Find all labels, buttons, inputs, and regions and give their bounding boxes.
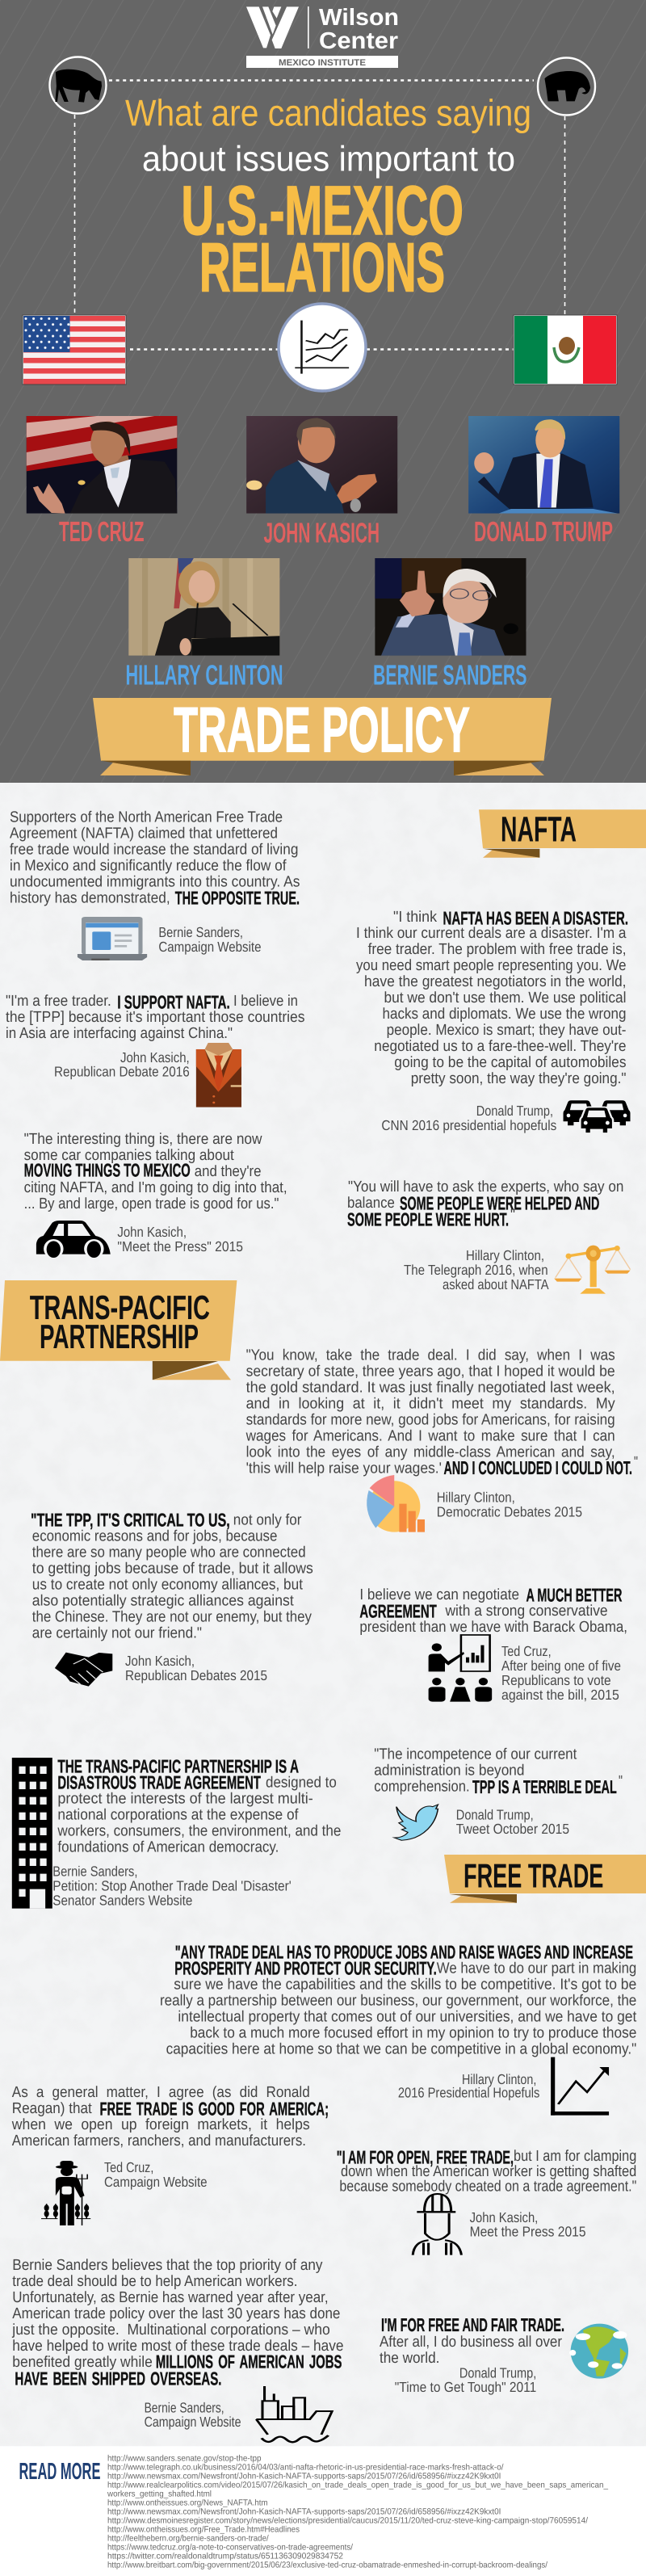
panel: NAFTA section bbox=[6, 809, 646, 1294]
attribution: Bernie Sanders, Campaign Website bbox=[145, 2400, 241, 2430]
attribution: Hillary Clinton, Democratic Debates 2015 bbox=[437, 1489, 582, 1519]
logo: Wilson Center: Wilson bbox=[319, 5, 399, 31]
name: Hillary Clinton: HILLARY CLINTON bbox=[126, 659, 283, 691]
text: Bernie Sanders on NAFTA: Supporters of the North American Free Trade bbox=[10, 809, 283, 826]
panel: candidates bbox=[27, 416, 619, 691]
attribution: Ted Cruz, Campaign Website: Ted Cruz, bbox=[104, 2159, 153, 2175]
text: Kasich on car companies bbox=[24, 1131, 287, 1212]
attribution: Bernie Sanders, Campaign Website: Campaign Website bbox=[158, 939, 262, 955]
text: Kasich supports NAFTA: I SUPPORT NAFTA. bbox=[117, 992, 230, 1013]
text: Clinton on NAFTA: "You will have to ask the experts, who say on bbox=[348, 1179, 623, 1196]
text: Clinton on TPP: the gold standard. It was just finally negotiated last week, bbox=[246, 1379, 615, 1396]
text: Kasich on TPP: to getting jobs because of trade, but it allows bbox=[32, 1560, 313, 1577]
attribution: Bernie Sanders, Campaign Website: Bernie Sanders, bbox=[158, 924, 243, 940]
text: Sanders on free trade: benefited greatly while bbox=[12, 2354, 153, 2371]
attribution: John Kasich, Meet the Press 2015: John Kasich, bbox=[117, 1224, 187, 1240]
attribution: John Kasich, Meet the Press 2015 bbox=[117, 1224, 243, 1254]
text: Kasich on free trade: "I AM FOR OPEN, FREE TRADE, bbox=[337, 2146, 514, 2167]
source links list: http://www.sanders.senate.gov/stop-the-tpp bbox=[107, 2454, 262, 2464]
photo: John Kasich bbox=[246, 416, 397, 514]
attribution: John Kasich, Meet the Press 2015: "Meet the Press" 2015 bbox=[117, 1238, 243, 1254]
attribution: Bernie Sanders, petition bbox=[52, 1864, 292, 1909]
icon: cargo ship bbox=[256, 2386, 332, 2442]
icon: globe bbox=[569, 2324, 628, 2379]
text: Bernie Sanders on NAFTA: in Mexico and significantly reduce the flow of bbox=[10, 857, 287, 874]
text: Kasich on TPP: "THE TPP, IT'S CRITICAL TO US, bbox=[31, 1509, 230, 1530]
name: John Kasich: JOHN KASICH bbox=[263, 517, 380, 549]
source links list bbox=[107, 2454, 608, 2570]
text: Sanders on TPP: protect the interests of the largest multi- bbox=[57, 1790, 313, 1807]
source links list: http://feelthebern.org/bernie-sanders-on-trade/ bbox=[107, 2533, 269, 2543]
text: Trump on NAFTA: free trader. The problem with free trade is, bbox=[368, 941, 627, 958]
logo: Wilson Center bbox=[246, 5, 399, 68]
text: Clinton on NAFTA bbox=[347, 1179, 623, 1229]
icon: farmer bbox=[41, 2161, 90, 2225]
text: Trump on NAFTA: going to be the capital of automobiles bbox=[394, 1054, 627, 1071]
text: Clinton on NAFTA: SOME PEOPLE WERE HURT. bbox=[347, 1208, 509, 1229]
attribution: Bernie Sanders, Campaign Website: Bernie Sanders, bbox=[145, 2400, 224, 2416]
text: Trump on NAFTA: pretty soon, the way they're going." bbox=[411, 1070, 627, 1087]
text: Sanders on TPP: foundations of American democracy. bbox=[57, 1838, 279, 1855]
text: Ted Cruz on free trade: Reagan) that bbox=[12, 2100, 92, 2117]
attribution: Donald Trump, tweet: Donald Trump, bbox=[456, 1806, 534, 1822]
attribution: John Kasich, Republican Debate 2016: John Kasich, bbox=[120, 1049, 190, 1065]
photo: Bernie Sanders bbox=[375, 558, 526, 656]
text: Trump on NAFTA: I think our current deals are a disaster. I'm a bbox=[356, 925, 627, 942]
name: Ted Cruz: TED CRUZ bbox=[59, 516, 144, 548]
attribution: Ted Cruz, after vote: Republicans to vote bbox=[501, 1672, 611, 1688]
text: Kasich on TPP: there are so many people who are connected bbox=[32, 1544, 306, 1561]
attribution: Bernie Sanders, petition: Bernie Sanders, bbox=[52, 1864, 137, 1880]
attribution: Donald Trump, tweet bbox=[456, 1806, 569, 1837]
banner: NAFTA: NAFTA bbox=[501, 810, 577, 850]
text: Kasich on TPP: economic reasons and for jobs, because bbox=[32, 1528, 277, 1544]
heading: Read More: READ MORE bbox=[19, 2459, 100, 2485]
panel: header masthead bbox=[23, 5, 617, 391]
text: Sanders on free trade: Bernie Sanders believes that the top priority of any bbox=[12, 2257, 323, 2274]
attribution: Hillary Clinton, The Telegraph 2016 bbox=[404, 1247, 549, 1292]
icon: democratic donkey bbox=[50, 57, 107, 113]
icon: office building bbox=[12, 1758, 52, 1909]
icon: scales bbox=[554, 1246, 631, 1294]
text: Sanders on free trade: MILLIONS OF AMERICAN JOBS bbox=[156, 2351, 342, 2372]
text: Clinton on TPP: standards for more new, good jobs for Americans, for raising bbox=[246, 1411, 615, 1428]
attribution: Ted Cruz, after vote: against the bill, 2015 bbox=[501, 1687, 619, 1703]
icon: republican elephant bbox=[538, 58, 595, 115]
text: Kasich on TPP: the Chinese. They are not our enemy, but they bbox=[32, 1608, 312, 1625]
text: Clinton on TPP: and in looking at it, it didn't meet my standards. My bbox=[246, 1395, 615, 1412]
text: Sanders on free trade: just the opposite. Multinational corporations – who bbox=[11, 2322, 330, 2339]
text: Sanders on free trade: HAVE BEEN SHIPPED OVERSEAS. bbox=[15, 2368, 222, 2389]
source links list: workers_getting_shafted.html bbox=[107, 2490, 212, 2499]
text: Trump on NAFTA: negotiated us to a fare-thee-well. They're bbox=[374, 1038, 627, 1055]
attribution: John Kasich, Meet the Press 2015: Meet the Press 2015 bbox=[470, 2223, 586, 2239]
text: Trump on TPP: comprehension. bbox=[374, 1778, 470, 1795]
attribution: Bernie Sanders, petition: Petition: Stop Another Trade Deal 'Disaster' bbox=[52, 1878, 292, 1894]
attribution: Hillary Clinton, 2016 Presidential Hopefuls bbox=[398, 2071, 540, 2101]
attribution: Hillary Clinton, 2016 Presidential Hopefuls: 2016 Presidential Hopefuls bbox=[398, 2085, 540, 2101]
text: Sanders on TPP: national corporations at the expense of bbox=[57, 1806, 299, 1823]
text: Trump on free trade: After all, I do business all over bbox=[380, 2334, 563, 2351]
icon: twitter bird bbox=[394, 1805, 438, 1840]
text: Bernie Sanders on NAFTA: undocumented immigrants into this country. As bbox=[10, 873, 300, 890]
icon: presenter and audience bbox=[429, 1635, 492, 1702]
panel: footer read more bbox=[0, 2446, 646, 2576]
text: Trump on TPP: " bbox=[619, 1773, 623, 1790]
attribution: Donald Trump, Time to Get Tough: Donald Trump, bbox=[459, 2364, 536, 2381]
text: Trump on TPP bbox=[374, 1746, 623, 1797]
text: Kasich on car companies: citing NAFTA, and I'm going to dig into that, bbox=[24, 1179, 287, 1196]
icon: suit bbox=[196, 1043, 241, 1107]
text: Sanders on free trade: Unfortunately, as Bernie has warned year after year, bbox=[12, 2289, 329, 2306]
attribution: Donald Trump, Time to Get Tough: "Time to Get Tough" 2011 bbox=[395, 2379, 536, 2395]
title: What are candidates saying bbox=[125, 92, 531, 134]
name: Bernie Sanders: BERNIE SANDERS bbox=[373, 659, 526, 691]
text: Sanders on TPP: workers, consumers, the environment, and the bbox=[57, 1822, 341, 1839]
text: Ted Cruz on free trade: As a general matter, I agree (as did Ronald bbox=[12, 2084, 310, 2101]
text: Bernie Sanders on NAFTA: Agreement (NAFTA) claimed that unfettered bbox=[10, 825, 278, 842]
panel: Trans-Pacific Partnership section bbox=[0, 1280, 638, 1909]
text: Clinton on TPP: 'this will help raise your wages.' bbox=[246, 1460, 442, 1477]
source links list: http://www.newsmax.com/Newsfront/John-Kasich-NAFTA-supports-saps/2015/07/26/id/658956/#ixzz42K9kxt0I bbox=[107, 2507, 501, 2517]
banner: Trans-Pacific Partnership: TRANS-PACIFIC bbox=[30, 1288, 210, 1326]
text: Trump on TPP: administration is beyond bbox=[374, 1762, 525, 1779]
text: Kasich supports NAFTA bbox=[6, 992, 305, 1042]
attribution: John Kasich, Republican Debate 2016 bbox=[54, 1049, 190, 1080]
attribution: Bernie Sanders, Campaign Website bbox=[158, 924, 262, 955]
text: Trump on TPP: "The incompetence of our current bbox=[374, 1746, 577, 1763]
source links list: http://www.breitbart.com/big-government/2015/06/23/exclusive-ted-cruz-obamatrade-enmeshed-in-corrupt-backroom-dealings/ bbox=[107, 2561, 547, 2570]
text: Sanders on free trade: trade deal should be to help American workers. bbox=[12, 2273, 297, 2290]
attribution: Bernie Sanders, petition: Senator Sanders Website bbox=[52, 1893, 192, 1909]
text: Sanders on TPP bbox=[57, 1755, 341, 1855]
text: Clinton on NAFTA: balance bbox=[347, 1195, 395, 1212]
banner: Trans-Pacific Partnership: PARTNERSHIP bbox=[40, 1317, 199, 1355]
text: Sanders on free trade: American trade policy over the last 30 years has done bbox=[12, 2305, 340, 2322]
text: Kasich on car companies: some car companies talking about bbox=[24, 1147, 234, 1164]
icon: US flag bbox=[23, 315, 126, 385]
text: Ted Cruz on free trade: when we open up foreign markets, it helps bbox=[11, 2116, 310, 2133]
text: Clinton on NAFTA: " bbox=[510, 1207, 515, 1224]
source links list: http://www.newsmax.com/Newsfront/John-Kasich-NAFTA-supports-saps/2015/07/26/id/658956/#ixzz42K9kxt0I bbox=[107, 2472, 501, 2481]
icon: chart in circle bbox=[279, 304, 366, 391]
photo: Ted Cruz bbox=[27, 416, 177, 514]
title: U.S.-MEXICO bbox=[181, 172, 464, 250]
attribution: Donald Trump, tweet: Tweet October 2015 bbox=[456, 1821, 569, 1837]
attribution: Hillary Clinton, The Telegraph 2016: The Telegraph 2016, when bbox=[404, 1262, 548, 1278]
attribution: Ted Cruz, Campaign Website bbox=[104, 2159, 208, 2190]
attribution: Donald Trump, CNN 2016 bbox=[381, 1103, 557, 1133]
text: Sanders on TPP: THE TRANS-PACIFIC PARTNERSHIP IS A bbox=[57, 1755, 299, 1776]
text: Trump on NAFTA: have the greatest negotiators in the world, bbox=[364, 973, 627, 990]
text: Trump on free trade: the world. bbox=[380, 2350, 439, 2367]
text: Ted Cruz on TPP: with a strong conservative bbox=[445, 1603, 608, 1620]
text: Bernie Sanders on NAFTA: THE OPPOSITE TRUE. bbox=[175, 887, 300, 908]
icon: three cars bbox=[564, 1100, 631, 1133]
text: Trump on NAFTA: people. Mexico is smart; they have out- bbox=[387, 1022, 627, 1039]
text: Clinton on free trade bbox=[160, 1941, 637, 2058]
attribution: John Kasich, Republican Debates 2015: Republican Debates 2015 bbox=[125, 1667, 267, 1683]
source links list: http://www.ontheissues.org/News_NAFTA.htm bbox=[107, 2498, 268, 2507]
attribution: John Kasich, Republican Debates 2015: John Kasich, bbox=[125, 1653, 195, 1669]
attribution: Donald Trump, CNN 2016: Donald Trump, bbox=[476, 1103, 553, 1119]
attribution: Hillary Clinton, Democratic Debates 2015: Democratic Debates 2015 bbox=[437, 1503, 582, 1519]
text: Ted Cruz on TPP: I believe we can negotiate bbox=[359, 1586, 519, 1603]
text: Trump on NAFTA bbox=[356, 907, 628, 1087]
text: Bernie Sanders on NAFTA: free trade would increase the standard of living bbox=[10, 841, 298, 858]
attribution: John Kasich, Meet the Press 2015 bbox=[470, 2209, 586, 2239]
banner: Trade Policy: TRADE POLICY bbox=[174, 693, 470, 766]
text: Kasich supports NAFTA: in Asia are interfacing against China." bbox=[6, 1025, 233, 1042]
attribution: John Kasich, Meet the Press 2015: John Kasich, bbox=[470, 2209, 538, 2225]
text: Ted Cruz on free trade bbox=[11, 2084, 329, 2149]
logo: Wilson Center: Center bbox=[319, 28, 398, 54]
text: Kasich supports NAFTA: I believe in bbox=[233, 993, 298, 1010]
attribution: Hillary Clinton, 2016 Presidential Hopefuls: Hillary Clinton, bbox=[462, 2071, 536, 2087]
text: Kasich on TPP bbox=[31, 1509, 313, 1641]
title: about issues important to bbox=[142, 139, 515, 179]
text: Trump on NAFTA: "I think bbox=[393, 909, 437, 926]
text: Kasich on TPP: us to create not only economy alliances, but bbox=[32, 1576, 304, 1593]
text: Clinton on TPP: wages for Americans. And I want to make sure that I can bbox=[245, 1427, 615, 1444]
text: Sanders on free trade: have helped to write most of these trade deals – have bbox=[12, 2338, 344, 2355]
decorative connector frame bbox=[74, 81, 565, 349]
text: Trump on free trade bbox=[380, 2314, 564, 2367]
title bbox=[125, 92, 531, 307]
photo: Hillary Clinton bbox=[128, 558, 279, 656]
attribution: Hillary Clinton, The Telegraph 2016: Hillary Clinton, bbox=[466, 1247, 544, 1263]
text: Clinton on TPP: secretary of state, three years ago, that I hoped it would be bbox=[246, 1363, 615, 1380]
icon: construction worker bbox=[413, 2194, 461, 2255]
banner: Trade Policy bbox=[93, 693, 552, 775]
panel: Free Trade section bbox=[11, 1855, 646, 2442]
source links list: http://www.telegraph.co.uk/business/2016/04/03/anti-nafta-rhetoric-in-us-presidential-race-marks-fresh-attack-o/ bbox=[107, 2462, 504, 2472]
text: Clinton on TPP bbox=[245, 1347, 638, 1478]
icon: Mexican flag bbox=[514, 315, 617, 385]
banner: Trans-Pacific Partnership bbox=[0, 1280, 237, 1380]
icon: rising line chart bbox=[551, 2057, 609, 2116]
text: Kasich on TPP: are certainly not our friend." bbox=[32, 1624, 202, 1641]
attribution: Bernie Sanders, Campaign Website: Campaign Website bbox=[145, 2414, 241, 2430]
attribution: Ted Cruz, after vote: After being one of five bbox=[501, 1658, 621, 1674]
title: RELATIONS bbox=[199, 229, 445, 307]
source links list: http://www.realclearpolitics.com/video/2015/07/26/kasich_on_trade_deals_open_trade_is_good_for_us_but_we_have_been_saps_american_ bbox=[107, 2480, 608, 2490]
panel: header background bbox=[0, 0, 646, 783]
attribution: Hillary Clinton, Democratic Debates 2015: Hillary Clinton, bbox=[437, 1489, 515, 1505]
text: Bernie Sanders on NAFTA bbox=[10, 809, 300, 908]
text: Bernie Sanders on NAFTA: history has demonstrated, bbox=[10, 889, 170, 906]
text: Sanders on TPP: DISASTROUS TRADE AGREEMENT bbox=[57, 1771, 261, 1792]
text: Sanders on free trade bbox=[11, 2257, 343, 2389]
text: Trump on NAFTA: but we don't use them. We use political bbox=[384, 990, 627, 1006]
text: Kasich on car companies: MOVING THINGS TO MEXICO bbox=[24, 1160, 191, 1181]
text: Ted Cruz on free trade: FREE TRADE IS GOOD FOR AMERICA; bbox=[100, 2098, 329, 2119]
text: Trump on NAFTA: hacks and diplomats. We use the wrong bbox=[383, 1006, 627, 1023]
text: Clinton on TPP: look into the eyes of any middle-class American and say, bbox=[246, 1443, 615, 1460]
icon: laptop bbox=[78, 917, 147, 960]
attribution: Donald Trump, Time to Get Tough bbox=[395, 2364, 536, 2395]
icon: handshake bbox=[55, 1653, 112, 1687]
text: Ted Cruz on TPP bbox=[359, 1585, 627, 1636]
icon: pie chart bbox=[367, 1475, 425, 1532]
text: Kasich on TPP: not only for bbox=[233, 1511, 302, 1528]
attribution: John Kasich, Republican Debates 2015 bbox=[125, 1653, 267, 1683]
logo: Wilson Center: MEXICO INSTITUTE bbox=[279, 58, 366, 68]
attribution: Ted Cruz, after vote: Ted Cruz, bbox=[501, 1643, 552, 1659]
photo: Donald Trump bbox=[468, 416, 619, 514]
source links list: http://www.ontheissues.org/Free_Trade.htm#Headlines bbox=[107, 2525, 300, 2535]
attribution: Hillary Clinton, The Telegraph 2016: asked about NAFTA bbox=[443, 1276, 549, 1292]
attribution: Ted Cruz, after vote bbox=[501, 1643, 621, 1703]
banner: NAFTA bbox=[479, 809, 646, 858]
attribution: John Kasich, Republican Debate 2016: Republican Debate 2016 bbox=[54, 1064, 190, 1080]
source links list: https://twitter.com/realdonaldtrump/status/651136309029834752 bbox=[107, 2551, 343, 2561]
text: Kasich on free trade bbox=[337, 2146, 636, 2196]
icon: car bbox=[36, 1221, 111, 1259]
text: Kasich on car companies: and they're bbox=[195, 1163, 262, 1180]
text: Kasich on car companies: ... By and large, open trade is good for us." bbox=[24, 1196, 279, 1212]
text: Clinton on free trade: PROSPERITY AND PROTECT OUR SECURITY. bbox=[174, 1957, 437, 1978]
source links list: http://www.desmoinesregister.com/story/news/elections/presidential/caucus/2015/11/20/ted-cruz-steve-king-campaign-stop/76059514/ bbox=[107, 2515, 588, 2525]
attribution: Ted Cruz, Campaign Website: Campaign Website bbox=[104, 2174, 208, 2190]
text: Kasich on TPP: also potentially strategic alliances against bbox=[32, 1592, 294, 1609]
text: Clinton on TPP: " bbox=[634, 1454, 638, 1471]
attribution: Donald Trump, CNN 2016: CNN 2016 presidential hopefuls bbox=[381, 1117, 557, 1133]
text: Ted Cruz on TPP: AGREEMENT bbox=[359, 1601, 437, 1622]
text: Clinton on TPP: "You know, take the trade deal. I did say, when I was bbox=[246, 1347, 615, 1364]
text: Kasich supports NAFTA: the [TPP] because it's important those countries bbox=[6, 1009, 305, 1026]
text: Ted Cruz on free trade: American farmers, ranchers, and manufacturers. bbox=[12, 2133, 306, 2149]
text: Kasich on car companies: "The interesting thing is, there are now bbox=[24, 1131, 262, 1148]
text: Sanders on TPP: designed to bbox=[266, 1774, 337, 1791]
text: Kasich supports NAFTA: "I'm a free trader. bbox=[6, 993, 111, 1010]
source links list: https://www.tedcruz.org/a-note-to-conservatives-on-trade-agreements/ bbox=[107, 2543, 353, 2553]
